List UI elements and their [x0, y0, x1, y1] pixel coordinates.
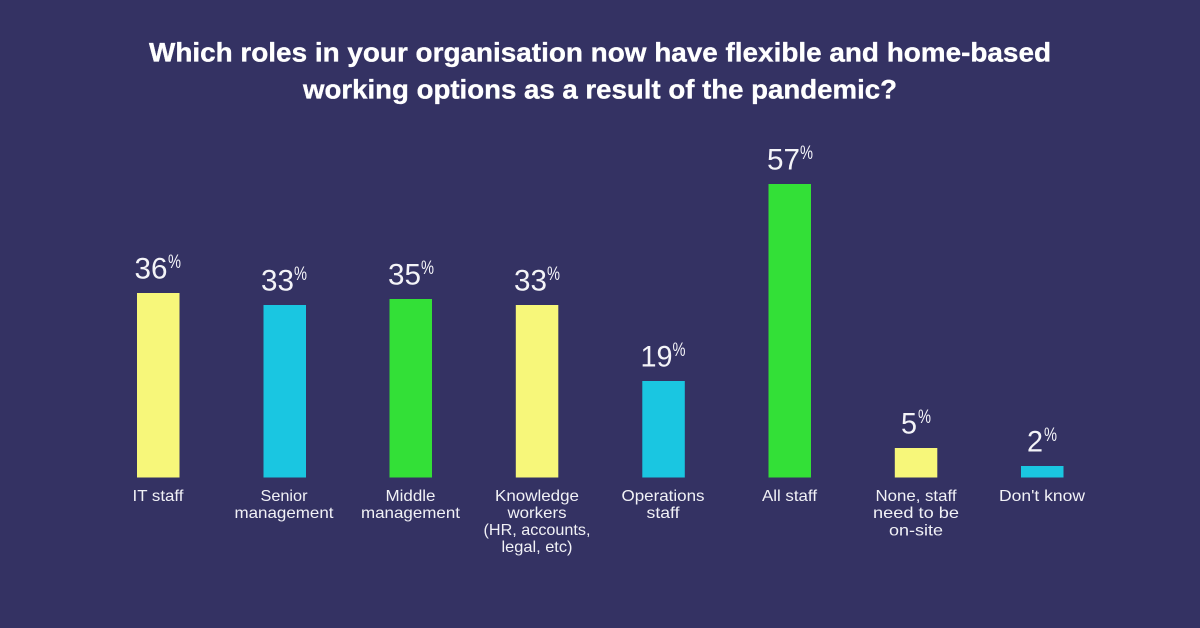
- column: IT staff 36%: 36: [134, 252, 168, 286]
- column: IT staff 36%: IT staff: [132, 488, 184, 505]
- column: None, staff need to be on-site 5%: None, staff: [876, 488, 957, 505]
- column: IT staff 36%: [132, 252, 184, 505]
- column: Don't know 2%: Don't know: [999, 488, 1085, 505]
- column: None, staff need to be on-site 5%: on-site: [889, 522, 943, 540]
- column: Operations staff 19%: 19: [640, 340, 672, 374]
- column: Senior management 33%: %: [294, 264, 307, 285]
- column: None, staff need to be on-site 5%: [873, 407, 959, 540]
- column: Knowledge workers 33%: workers: [506, 505, 566, 522]
- column: All staff 57%: %: [800, 143, 813, 164]
- column: Knowledge workers 33%: legal, etc): [502, 539, 572, 556]
- column: Senior management 33%: [234, 264, 334, 522]
- column: Knowledge workers 33%: 33: [514, 264, 547, 298]
- column: Middle management 35%: [361, 258, 461, 522]
- column: IT staff 36%: %: [168, 252, 181, 273]
- title: [149, 38, 1051, 104]
- title: working options as a result of the pandemic?: [302, 74, 897, 104]
- column: Operations staff 19%: Operations: [622, 488, 704, 505]
- column: Operations staff 19%: %: [672, 340, 686, 361]
- column: Senior management 33%: management: [234, 505, 334, 522]
- column: All staff 57%: All staff: [762, 488, 818, 505]
- column: Operations staff 19%: staff: [646, 505, 680, 522]
- column: Don't know 2%: 2: [1027, 426, 1043, 458]
- column: Middle management 35%: 35: [388, 258, 421, 292]
- column: Middle management 35%: Middle: [386, 488, 436, 505]
- column: Knowledge workers 33%: Knowledge: [495, 488, 579, 505]
- column: None, staff need to be on-site 5%: %: [918, 407, 931, 428]
- column: Don't know 2%: [999, 425, 1085, 505]
- column: All staff 57%: [762, 143, 818, 505]
- column: Knowledge workers 33%: %: [547, 264, 560, 285]
- column: Knowledge workers 33%: (HR, accounts,: [484, 522, 590, 539]
- column: Don't know 2%: %: [1044, 425, 1057, 446]
- column: None, staff need to be on-site 5%: need to be: [873, 505, 959, 522]
- column: Middle management 35%: %: [421, 258, 434, 279]
- column: Senior management 33%: 33: [261, 264, 294, 298]
- column: Middle management 35%: management: [361, 505, 461, 522]
- column: None, staff need to be on-site 5%: 5: [901, 408, 917, 440]
- title: Which roles in your organisation now have flexible and home-based: [149, 38, 1051, 68]
- column: Operations staff 19%: [622, 340, 704, 522]
- column: All staff 57%: 57: [767, 144, 800, 176]
- column: Knowledge workers 33%: [484, 264, 590, 556]
- column: Senior management 33%: Senior: [260, 488, 308, 505]
- bar chart: [132, 143, 1085, 556]
